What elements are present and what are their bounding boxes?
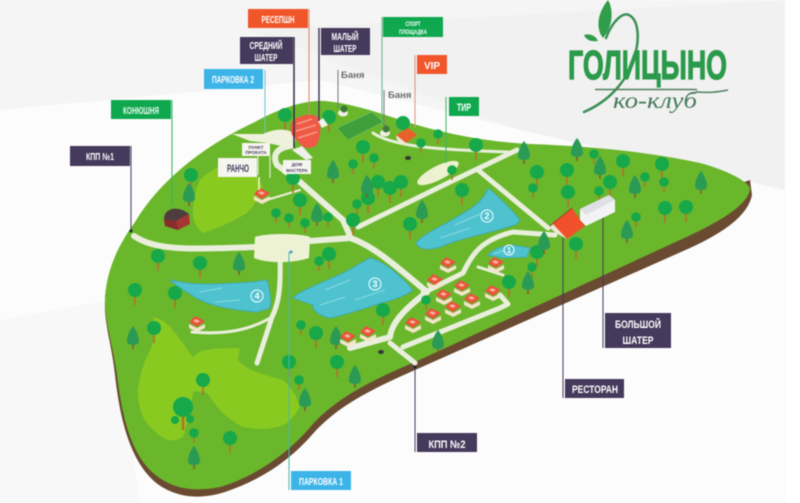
island ground edge (105, 180, 752, 497)
label: VIP: VIP (424, 61, 440, 72)
logo swirl (584, 14, 638, 112)
label: Спорт площадка: ПЛОЩАДКА (399, 29, 427, 36)
label: Парковка 2 (204, 69, 265, 133)
pond numbers (251, 210, 514, 302)
label: Ресторан (563, 238, 624, 398)
label: Спорт площадка (382, 17, 443, 125)
pond numbers: 1 (507, 246, 512, 255)
bathhouses (338, 106, 390, 136)
label: КПП №1 (70, 146, 132, 232)
label: Средний шатер: ШАТЕР (254, 53, 278, 64)
label: Ресторан: РЕСТОРАН (572, 384, 618, 396)
label: Ресепшн: РЕСЕПШН (262, 15, 294, 26)
restaurant (550, 208, 585, 239)
logo rule (595, 90, 728, 92)
label: Дом мастера (283, 160, 311, 174)
label: Пункт проката (242, 143, 270, 178)
label: Ранчо (218, 158, 259, 190)
pond numbers: 2 (484, 211, 490, 221)
sport field (337, 112, 383, 140)
label: КПП №1: КПП №1 (86, 152, 114, 163)
label: Малый шатер: МАЛЫЙ (332, 30, 358, 43)
roads (134, 130, 555, 363)
light lawn patches (138, 163, 300, 440)
label: Ресепшн (248, 9, 309, 115)
label: Средний шатер (240, 37, 294, 148)
label: Малый шатер (319, 28, 370, 121)
label: Тир: ТИР (457, 102, 471, 114)
label: Спорт площадка: СПОРТ (406, 21, 421, 28)
pond numbers: 4 (254, 291, 260, 301)
label: Баня 2 (384, 90, 411, 130)
label: Большой шатер: ШАТЕР (622, 335, 654, 347)
label: Большой шатер: БОЛЬШОЙ (615, 318, 661, 331)
logo (568, 0, 728, 113)
label: Дом мастера: ДОМ (292, 162, 302, 167)
label: Средний шатер: СРЕДНИЙ (250, 39, 282, 52)
pond numbers: 3 (372, 279, 378, 289)
label: Ранчо: РАНЧО (227, 163, 249, 175)
logo subtitle: ко-клуб (613, 88, 699, 113)
label: Пункт проката: ПУНКТ (249, 145, 264, 150)
label: Тир (446, 97, 479, 163)
label: КПП №2: КПП №2 (428, 439, 466, 451)
label: Конюшня (111, 100, 172, 206)
label: Малый шатер: ШАТЕР (334, 44, 357, 55)
cars (378, 156, 411, 354)
big tent (580, 195, 615, 226)
VIP house (396, 128, 417, 146)
label: Баня 1 (338, 70, 364, 108)
label: Большой шатер (603, 218, 671, 348)
label: Конюшня: КОНЮШНЯ (123, 106, 159, 117)
pond ripples (200, 214, 505, 305)
cottages (189, 188, 504, 347)
label: Баня 1: Баня (341, 70, 364, 81)
label: Дом мастера: МАСТЕРА (286, 168, 309, 173)
label: Пункт проката: ПРОКАТА (245, 150, 267, 155)
label: Парковка 1 (289, 250, 351, 490)
island map (105, 101, 752, 497)
ponds (170, 188, 530, 318)
icon: leaves (584, 0, 612, 41)
reception building (290, 115, 328, 160)
label: Парковка 2: ПАРКОВКА 2 (212, 75, 254, 86)
label: КПП №2 (414, 366, 477, 452)
barn (164, 209, 190, 230)
label: VIP (415, 55, 447, 128)
label: Парковка 1: ПАРКОВКА 1 (299, 477, 343, 488)
label: Баня 2: Баня (388, 90, 411, 101)
trees (127, 108, 707, 469)
island surface (105, 101, 750, 489)
